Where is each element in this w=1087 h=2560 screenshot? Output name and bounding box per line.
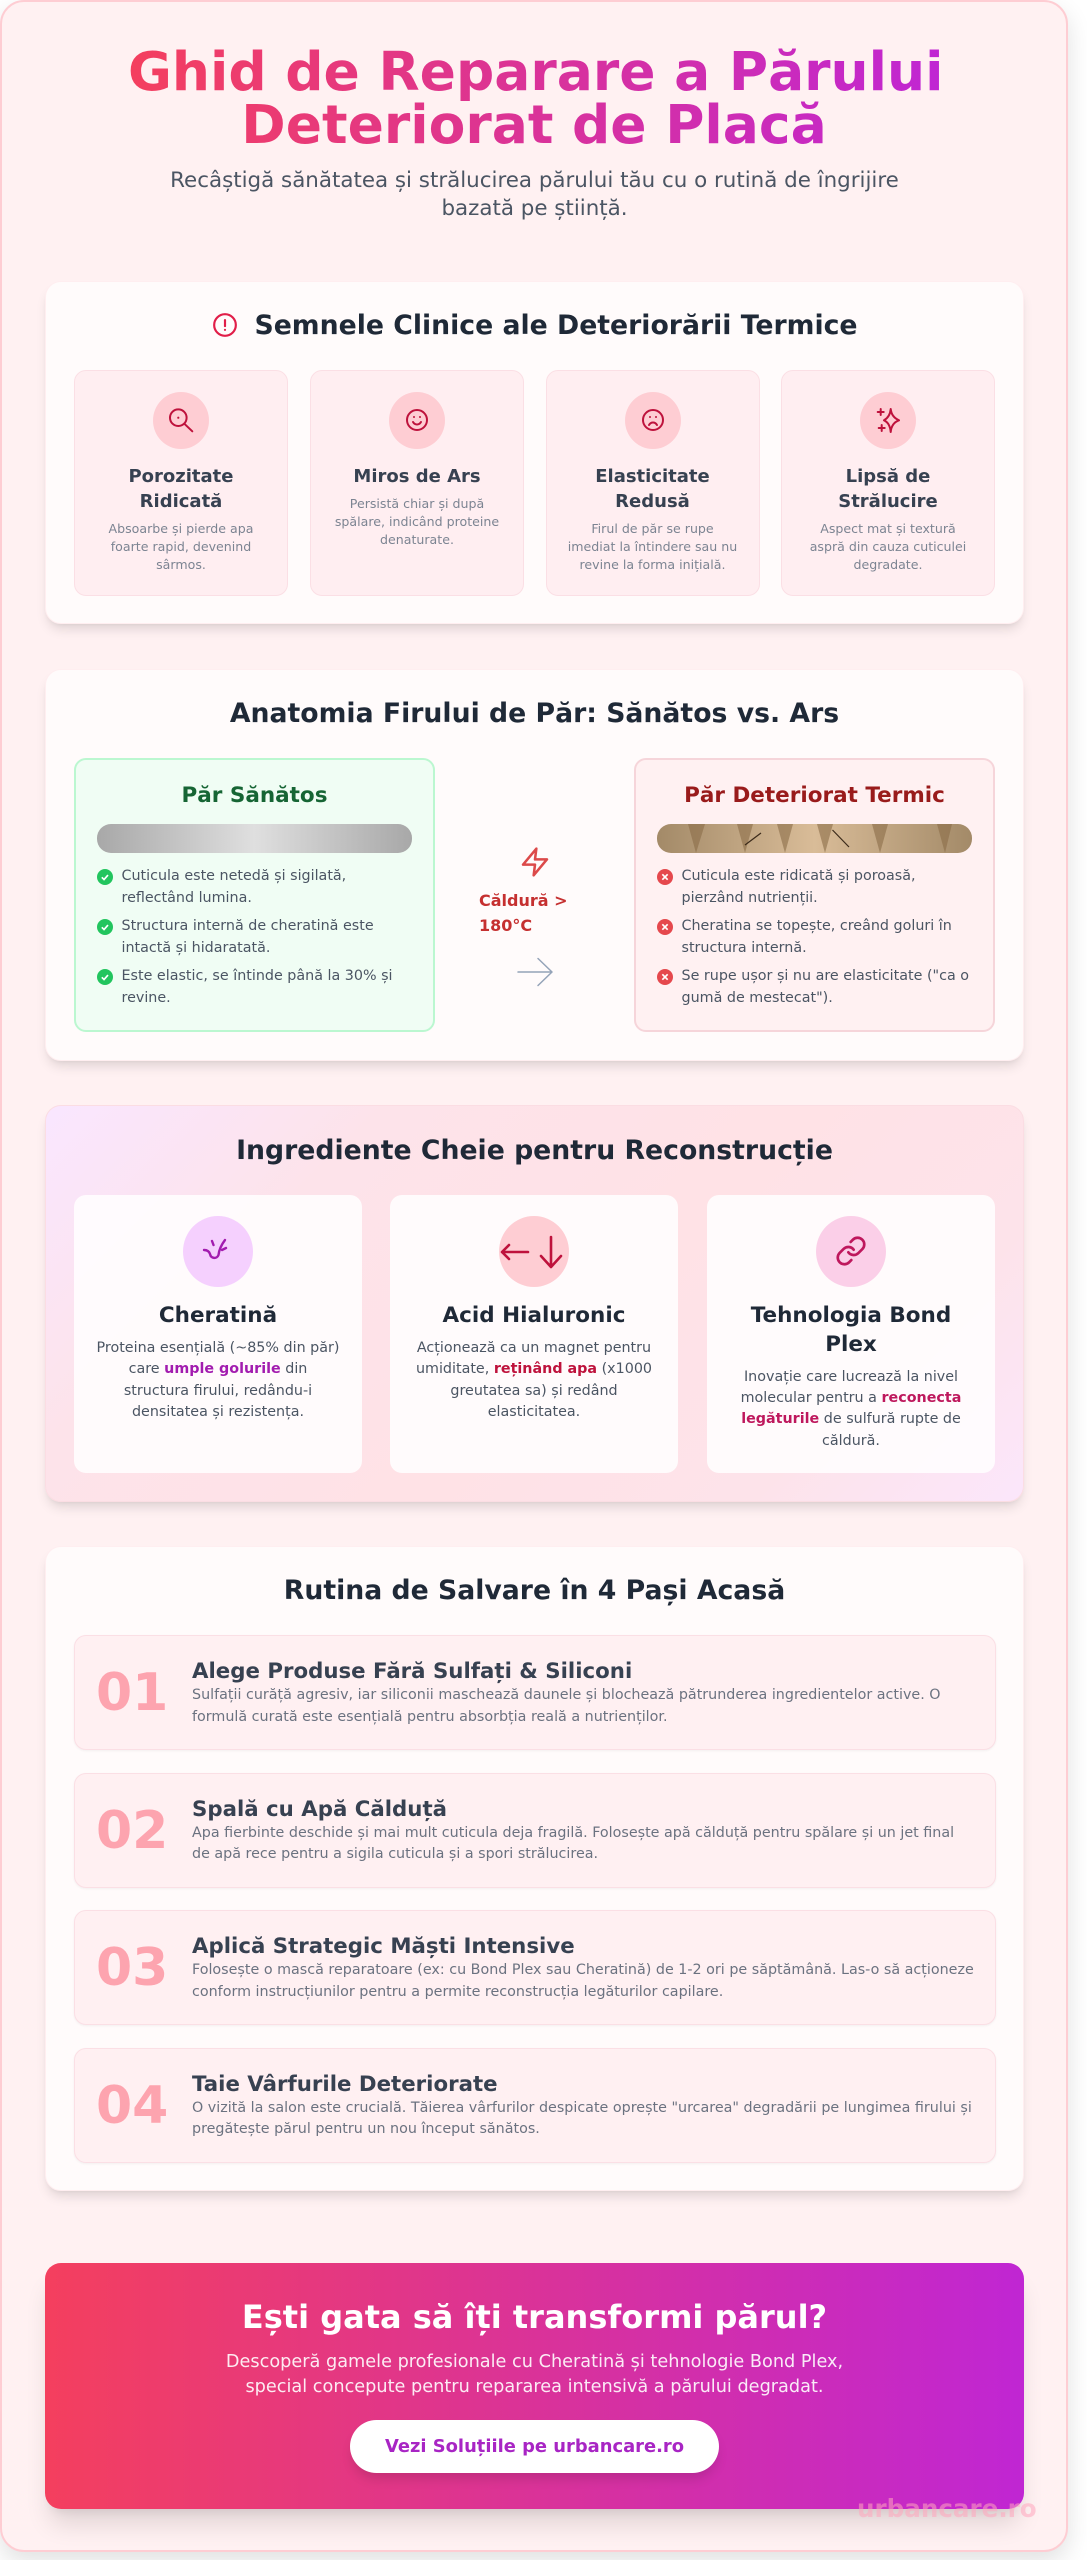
heading: routine: Rutina de Salvare în 4 Pași Acasă [284,1575,785,1606]
subtitle [170,168,899,221]
icon: lightning [522,847,548,877]
card title: Porozitate [128,466,234,486]
card text: foarte rapid, devenind [111,539,251,554]
step text: conform instrucțiunilor pentru a permite reconstrucția legăturilor capilare. [192,1984,723,2000]
step number: 02 [96,1800,168,1860]
card: healthy hair [74,758,435,1032]
card title: Redusă [615,490,690,512]
step 2 [74,1772,996,1888]
label: heat [479,890,568,934]
heading: clinical signs: Semnele Clinice ale Deteriorării Termice [254,310,858,341]
card title: Acid Hialuronic [442,1303,625,1328]
cross icon 2 [657,919,673,935]
list item 3: gumă de mestecat"). [682,990,833,1006]
step text: formulă curată este esențială pentru absorbția reală a nutrienților. [192,1708,668,1724]
card text [568,521,737,572]
illustration: damaged strand [657,824,972,853]
panel: 4-step routine [45,1546,1024,2191]
list item 1: reflectând lumina. [122,890,252,906]
card title: Miros de Ars [353,466,481,486]
illustration: healthy strand [97,824,412,853]
icon: alert [213,313,237,337]
card text: densitatea și rezistența. [132,1404,304,1420]
heading: anatomy: Anatomia Firului de Păr: Sănătos vs. Ars [230,698,839,729]
list item 3 [122,968,393,1006]
panel: clinical signs [45,281,1024,624]
card title [128,466,234,512]
step 4 [74,2048,996,2162]
list item 1: Cuticula este netedă și sigilată, [122,868,346,884]
arrow [517,958,553,986]
card: low elasticity [546,370,760,596]
card text: legăturile de sulfură rupte de [741,1411,961,1427]
card text [97,1340,339,1420]
CTA text: Descoperă gamele profesionale cu Cheratină și tehnologie Bond Plex, [226,2352,843,2372]
step 1 [74,1635,996,1750]
cross icon 3 [657,969,673,985]
list item 2: structura internă. [682,940,807,956]
subtitle: Recâștigă sănătatea și strălucirea părului tău cu o rutină de îngrijire [170,168,899,193]
list item 3: Este elastic, se întinde până la 30% și [122,968,393,984]
panel: hair anatomy [45,669,1024,1061]
heading: ingredients: Ingrediente Cheie pentru Reconstrucție [236,1135,833,1166]
list item 2 [122,918,374,956]
card text: umiditate, reținând apa (x1000 [416,1361,652,1377]
icon: arrows [499,1216,569,1287]
panel: key ingredients [45,1105,1024,1502]
card text [108,521,253,572]
step text [192,2100,972,2137]
card title: Tehnologia Bond [751,1303,951,1328]
card title: Plex [825,1332,877,1357]
step text: Sulfații curăță agresiv, iar siliconii maschează daunele și blochează pătrunderea ingredientelor active. O [192,1687,941,1703]
step text: Folosește o mască reparatoare (ex: cu Bond Plex sau Cheratină) de 1-2 ori pe săptămână. Las-o să acționeze [192,1962,974,1978]
step 3 [74,1910,996,2025]
card text: spălare, indicând proteine [335,514,499,529]
list item 2: Structura internă de cheratină este [122,918,374,934]
CTA text [226,2352,843,2396]
card text: care umple golurile din [129,1361,307,1377]
title: Ghid de Reparare a Părului [128,40,943,103]
list item 2: intactă și hidaratată. [122,940,270,956]
card text: Absoarbe și pierde apa [109,521,253,536]
card title: Păr Sănătos [181,783,328,808]
card text: revine la forma inițială. [580,557,726,572]
card: keratin [74,1195,362,1473]
card title: Lipsă de [846,466,930,486]
step title: Spală cu Apă Călduță [192,1796,447,1822]
step text [192,1687,941,1724]
step text: pregătește părul pentru un nou început sănătos. [192,2121,540,2137]
list item 2: Cheratina se topește, creând goluri în [682,918,952,934]
step text [192,1962,974,2000]
icon: smile [389,392,445,449]
list item 1: Cuticula este ridicată și poroasă, [682,868,916,884]
step number: 03 [96,1938,168,1998]
card: burnt smell [310,370,524,596]
label: heat: 180°C [479,916,532,934]
check icon 1 [97,869,113,885]
card text: Aspect mat și textură [820,521,956,536]
step title: Aplică Strategic Măști Intensive [192,1934,575,1959]
card text: structura firului, redându-i [124,1383,312,1399]
step number: 04 [96,2076,168,2136]
list item 3: revine. [122,990,171,1006]
title [128,45,940,151]
check icon 3 [97,969,113,985]
label: heat: Căldură > [479,890,568,910]
card title: Păr Deteriorat Termic [684,783,945,808]
icon: frown [624,392,680,449]
title: Deteriorat de Placă [241,93,827,156]
card text: Proteina esențială (~85% din păr) [97,1340,339,1356]
card text: Acționează ca un magnet pentru [417,1340,651,1356]
card text [741,1368,961,1449]
list item 2 [682,918,952,956]
icon: magnifier [153,392,209,449]
card text [810,521,966,572]
step title: Alege Produse Fără Sulfați & Siliconi [192,1659,632,1684]
card text: sârmos. [156,557,206,572]
card text: Persistă chiar și după [350,496,484,511]
card title: Strălucire [838,490,938,512]
card title: Elasticitate [595,466,710,486]
card title [750,1303,951,1357]
step number: 01 [96,1663,168,1723]
CTA text: special concepute pentru repararea intensivă a părului degradat. [245,2376,824,2396]
card text [335,496,499,547]
check icon 2 [97,919,113,935]
list item 1: pierzând nutrienții. [682,890,818,906]
CTA button: Vezi Soluțiile pe urbancare.ro [385,2436,684,2457]
CTA heading: Ești gata să îți transformi părul? [242,2298,827,2336]
cross icon 1 [657,869,673,885]
card: porosity [74,370,288,596]
step title: Taie Vârfurile Deteriorate [192,2072,498,2096]
card text [416,1340,652,1420]
card: hyaluronic acid [390,1195,678,1473]
card text: imediat la întindere sau nu [568,539,737,554]
list item 3 [682,968,969,1006]
card title: Ridicată [140,490,222,512]
card text: elasticitatea. [488,1404,580,1420]
icon: sparkles [860,392,916,449]
icon: keratin [183,1216,253,1287]
card title [595,466,710,512]
card text: degradate. [853,557,923,572]
step text: de apă rece pentru a sigila cuticula și a spori strălucirea. [192,1846,598,1862]
list item 3: Se rupe ușor și nu are elasticitate ("ca o [682,968,969,984]
card text: aspră din cauza cuticulei [810,539,966,554]
step text [192,1824,954,1862]
list item 1 [682,868,916,906]
card text: Firul de păr se rupe [591,521,714,536]
card text: molecular pentru a reconecta [741,1390,961,1406]
icon: link [816,1216,886,1287]
watermark: urbancare.ro [857,2494,1037,2523]
step text: O vizită la salon este crucială. Tăierea vârfurilor despicate oprește "urcarea" degradării pe lungimea firului și [192,2100,972,2116]
card title [838,466,938,512]
card text: greutatea sa) și redând [450,1383,618,1399]
card title: Cheratină [159,1303,277,1328]
panel: call to action [45,2263,1024,2509]
card text: căldură. [822,1433,880,1449]
card: damaged hair [634,758,995,1032]
heat transition [479,847,568,986]
subtitle: bazată pe știință. [441,196,628,221]
CTA button [350,2420,719,2473]
step text: Apa fierbinte deschide și mai mult cuticula deja fragilă. Folosește apă călduță pentru spălare și un jet final [192,1824,954,1840]
card: bond plex [707,1195,995,1473]
card: no shine [781,370,995,596]
card text: Inovație care lucrează la nivel [744,1368,958,1384]
card text: denaturate. [380,532,454,547]
list item 1 [122,868,346,906]
